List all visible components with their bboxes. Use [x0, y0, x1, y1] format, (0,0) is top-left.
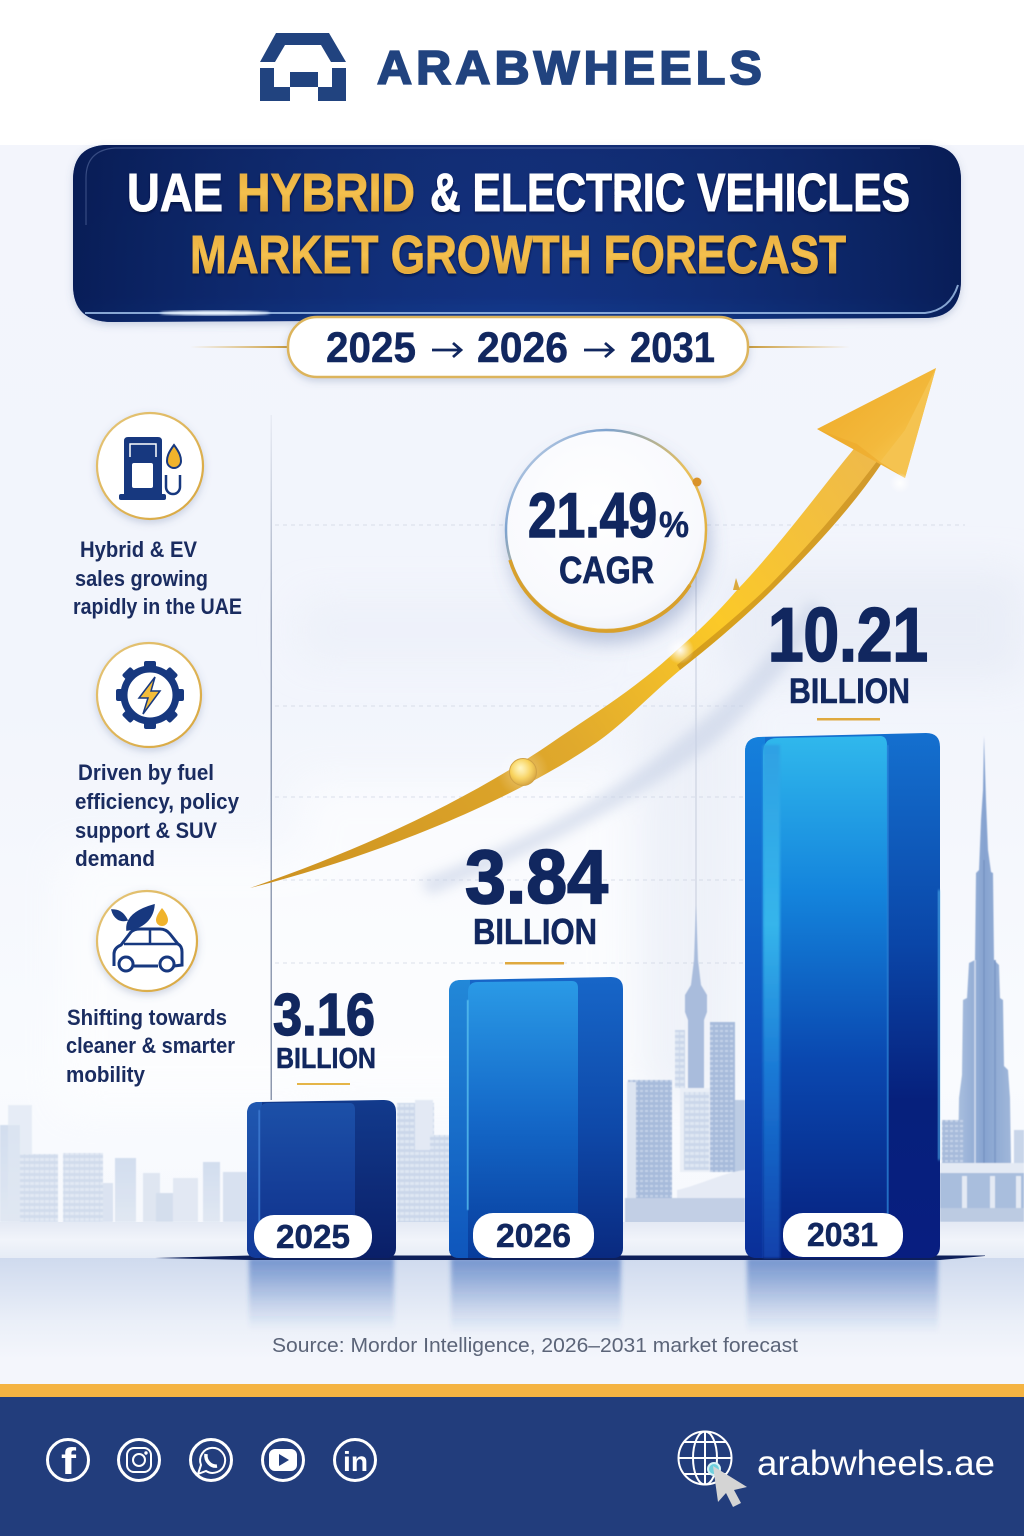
icon: globe with cursor: [678, 1431, 747, 1507]
CAGR value: 21.49: [528, 481, 657, 551]
bar: 2026: [449, 977, 623, 1258]
chart axis lines: [270, 415, 696, 1100]
title line 2: MARKET GROWTH FORECAST: [190, 225, 846, 285]
text: drivers: demand: [75, 846, 155, 871]
soft background haze: [60, 570, 1024, 1110]
logo: [260, 33, 766, 101]
timeline pill: [288, 317, 748, 377]
text: cleaner mobility: cleaner & smarter: [66, 1033, 235, 1058]
timeline years: 2026: [477, 324, 568, 372]
text: drivers: support & SUV: [75, 818, 217, 843]
title line 1: & ELECTRIC VEHICLES: [430, 163, 910, 223]
logo mark: [260, 33, 346, 101]
text: cleaner mobility: [66, 1005, 235, 1087]
water strip: [0, 1222, 1024, 1258]
source note: Source: Mordor Intelligence, 2026–2031 market forecast: [272, 1335, 798, 1357]
floor: [0, 1258, 1024, 1385]
year pill: 2026: 2026: [496, 1217, 571, 1254]
year pill: 2026: [473, 1213, 594, 1258]
text: hybrid and EV sales: Hybrid & EV: [80, 537, 197, 562]
CAGR percent sign: %: [659, 504, 689, 545]
title line 1: HYBRID: [237, 163, 415, 223]
icon: facebook: [48, 1440, 88, 1482]
footer accent stripe: [0, 1384, 1024, 1397]
icon: gear with lightning bolt: [97, 643, 201, 747]
CAGR label: CAGR: [559, 550, 654, 592]
value: 2026: 3.84: [465, 835, 608, 920]
title line 1: [127, 163, 910, 223]
timeline flourish left: [190, 346, 288, 348]
text: cleaner mobility: Shifting towards: [67, 1005, 227, 1030]
text: drivers: Driven by fuel: [78, 760, 214, 785]
icon: instagram: [118, 1440, 160, 1480]
year pill: 2025: 2025: [276, 1218, 350, 1255]
footer: [0, 1397, 1024, 1536]
text: drivers: efficiency, policy: [75, 789, 240, 814]
value: 2026: BILLION: [473, 911, 597, 952]
icon: youtube: [262, 1440, 304, 1480]
year pill: 2025: [254, 1215, 372, 1258]
header background: [0, 0, 1024, 145]
value: 2025: 3.16: [273, 982, 375, 1048]
text: hybrid and EV sales: rapidly in the UAE: [73, 594, 242, 619]
arrow shadow: [420, 600, 825, 895]
text: hybrid and EV sales: sales growing: [75, 566, 208, 591]
title line 1: UAE: [127, 163, 223, 223]
logo wordmark: ARABWHEELS: [377, 41, 766, 94]
text: drivers: [75, 760, 240, 871]
value: 2026: [465, 835, 608, 964]
value: 2025: [273, 982, 376, 1085]
skyline: left: [0, 1105, 247, 1222]
bar reflections: [249, 1258, 938, 1333]
timeline years: [326, 324, 715, 372]
year pill: 2031: [783, 1213, 903, 1257]
CAGR badge: [505, 429, 740, 631]
text: cleaner mobility: mobility: [66, 1062, 146, 1087]
icon: eco car: [97, 891, 197, 991]
value: 2025: BILLION: [276, 1043, 376, 1075]
text: hybrid and EV sales: [73, 537, 242, 619]
timeline years: 2031: [630, 324, 715, 372]
ground line: [155, 1256, 985, 1260]
timeline flourish right: [748, 346, 850, 348]
value: 2031: BILLION: [789, 672, 910, 711]
skyline: centre: [397, 905, 745, 1223]
icon: fuel pump: [97, 413, 203, 519]
growth arrow: [250, 368, 936, 888]
icon: linkedin: in: [343, 1446, 368, 1477]
icon: linkedin: [334, 1440, 376, 1480]
website url: arabwheels.ae: [757, 1444, 995, 1483]
icon: facebook: f: [61, 1441, 77, 1482]
value: 2031: [768, 593, 928, 720]
timeline years: 2025: [326, 324, 416, 372]
title panel: [73, 145, 961, 322]
chart grid lines: [275, 525, 965, 963]
bar: 2031: [745, 733, 940, 1258]
year pill: 2031: 2031: [807, 1216, 878, 1253]
value: 2031: 10.21: [768, 593, 928, 678]
icon: whatsapp: [190, 1440, 232, 1480]
bar: 2025: [247, 1100, 396, 1258]
skyline: Burj tower: [940, 736, 1024, 1222]
